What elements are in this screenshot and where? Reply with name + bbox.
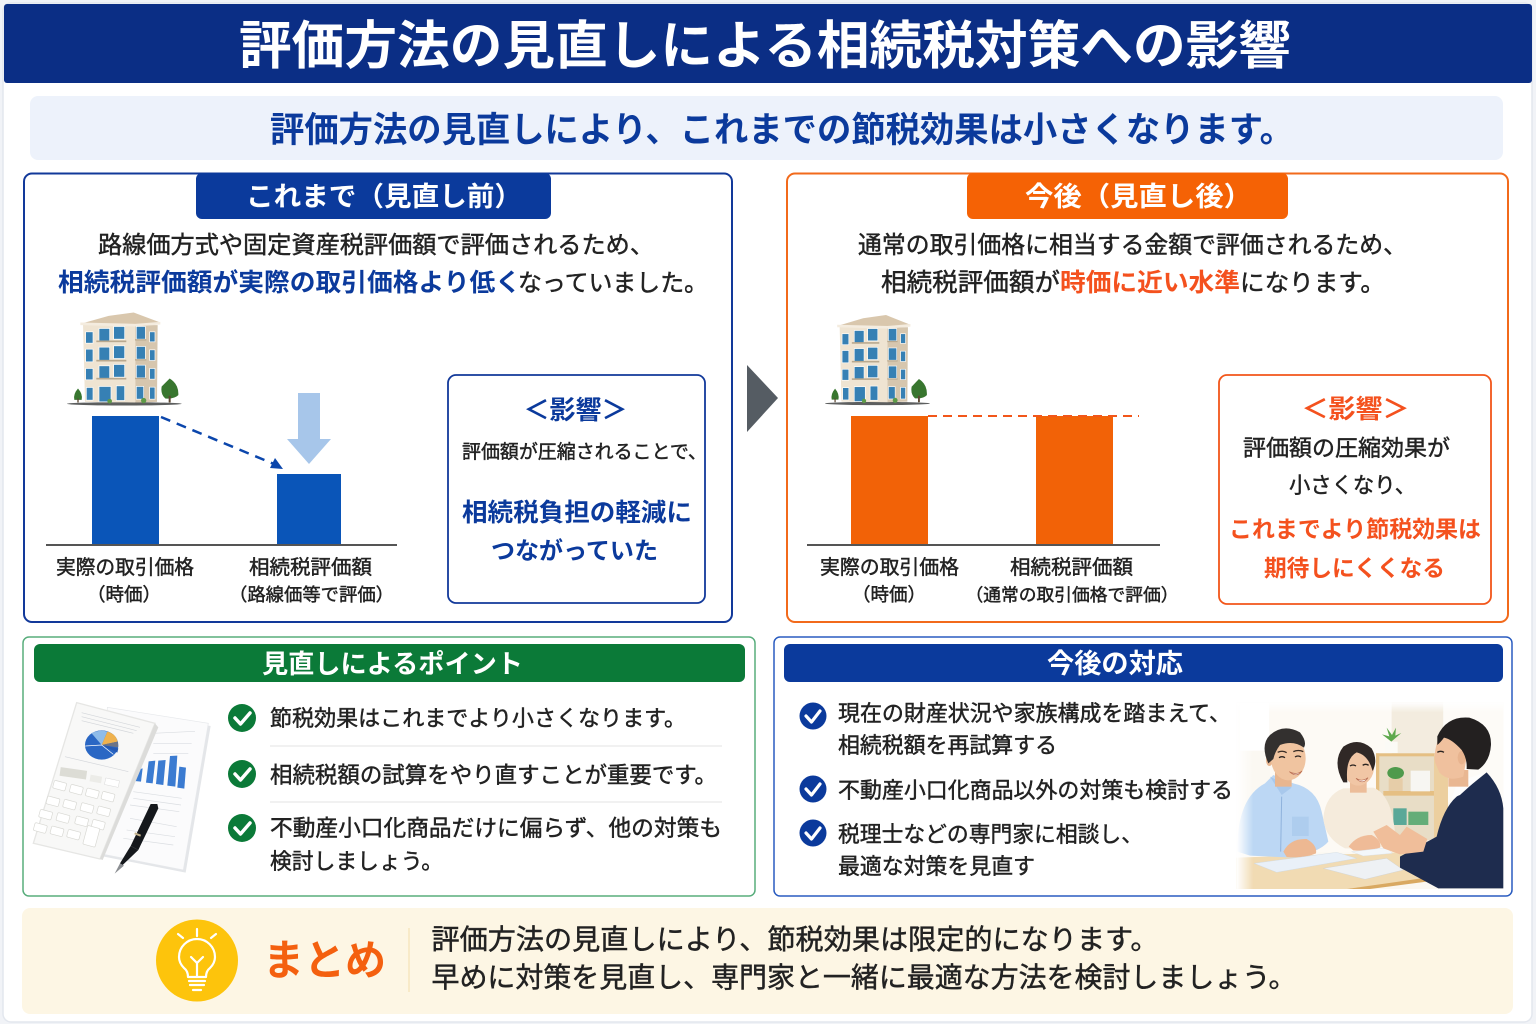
bar label: tax valuation: [966, 556, 1178, 605]
subtitle banner: [30, 96, 1503, 160]
illustration: family consulting an advisor: [1237, 702, 1503, 889]
description text: なっていました。: [518, 270, 708, 297]
heading: future actions: 今後の対応: [1047, 649, 1183, 679]
arrow: before to after: [747, 365, 778, 432]
callout: impact after: 期待しにくくなる: [1264, 555, 1445, 581]
bar label: market price: 実際の取引価格: [56, 556, 194, 579]
bar chart: after: [807, 416, 1160, 545]
callout: impact before: [448, 375, 707, 603]
pen: [115, 804, 158, 874]
arrow: dashed decrease: [161, 417, 283, 469]
summary text: 評価方法の見直しにより、節税効果は限定的になります。: [432, 924, 1158, 955]
documents on table: [1254, 848, 1403, 879]
panel: after review: [787, 173, 1508, 622]
summary label: まとめ: [263, 937, 386, 984]
advisor: [1373, 717, 1503, 888]
panel: summary: [22, 908, 1513, 1014]
heading: review points: [34, 644, 745, 682]
table: [1237, 852, 1427, 889]
callout: impact before: 相続税負担の軽減に: [462, 499, 692, 527]
description text: 通常の取引価格に相当する金額で評価されるため、: [858, 232, 1407, 259]
illustration: calculator, report and pen: [33, 703, 211, 874]
panel heading: before: これまで（見直し前）: [246, 182, 522, 212]
bookshelf: [1376, 728, 1448, 840]
bar label: tax valuation: 相続税評価額: [1010, 556, 1133, 579]
callout: impact after: [1219, 375, 1491, 604]
panel: review points: [23, 637, 755, 896]
summary text: [432, 924, 1296, 993]
summary text: 早めに対策を見直し、専門家と一緒に最適な方法を検討しましょう。: [432, 962, 1296, 993]
title text: 評価方法の見直しによる相続税対策への影響: [239, 18, 1291, 76]
bar label: tax valuation: （通常の取引価格で評価）: [966, 585, 1178, 605]
callout: impact before: ＜影響＞: [524, 395, 628, 425]
panel heading: after: 今後（見直し後）: [1025, 182, 1252, 212]
check item 3: 不動産小口化商品だけに偏らず、他の対策も: [270, 816, 722, 841]
man: [1237, 728, 1328, 858]
callout: impact before: 評価額が圧縮されることで、: [462, 441, 707, 463]
bar label: market price: [56, 556, 194, 605]
bar label: market price: （時価）: [87, 584, 161, 605]
action item 3: 最適な対策を見直す: [838, 854, 1035, 879]
callout: impact after: 評価額の圧縮効果が: [1243, 436, 1450, 461]
bar label: tax valuation: 相続税評価額: [249, 556, 372, 579]
check item 2: 相続税額の試算をやり直すことが重要です。: [270, 763, 717, 788]
callout: impact before: つながっていた: [491, 537, 658, 565]
callout: impact after: これまでより節税効果は: [1229, 516, 1481, 542]
panel heading: after: [967, 173, 1288, 219]
action item 2: 不動産小口化商品以外の対策も検討する: [838, 778, 1233, 803]
arrow: compression: [287, 393, 331, 464]
heading: review points: 見直しによるポイント: [262, 649, 523, 679]
description text: 路線価方式や固定資産税評価額で評価されるため、: [98, 232, 654, 259]
panel heading: before: [196, 173, 551, 219]
action item 1: 相続税額を再試算する: [838, 733, 1057, 758]
callout: impact after: 小さくなり、: [1289, 473, 1416, 498]
bar label: tax valuation: （路線価等で評価）: [229, 585, 394, 605]
description text: 時価に近い水準: [1060, 269, 1240, 297]
bar label: market price: （時価）: [852, 584, 926, 605]
action item 3: 税理士などの専門家に相談し、: [838, 822, 1143, 847]
panel: future actions: [774, 637, 1512, 896]
check item 3: [228, 814, 722, 874]
checklist: review points: [228, 704, 722, 874]
check item 1: 節税効果はこれまでより小さくなります。: [270, 706, 686, 731]
woman: [1323, 742, 1396, 851]
icon: building: [825, 315, 930, 405]
action item 3: [800, 820, 1143, 879]
bar chart: before: [46, 393, 397, 545]
icon: light bulb: [156, 920, 238, 1002]
bar label: market price: [820, 556, 959, 605]
check item 3: 検討しましょう。: [270, 849, 443, 874]
bar label: market price: 実際の取引価格: [820, 556, 959, 579]
checklist: future actions: [800, 701, 1233, 879]
bar label: tax valuation: [229, 556, 394, 605]
subtitle text: 評価方法の見直しにより、これまでの節税効果は小さくなります。: [270, 111, 1294, 150]
heading: future actions: [784, 644, 1503, 682]
description text: 相続税評価額が: [881, 269, 1060, 297]
title banner: [4, 4, 1532, 83]
description text: [58, 232, 708, 297]
panel: before review: [24, 173, 732, 622]
action item 1: [800, 701, 1231, 758]
description text: 相続税評価額が実際の取引価格より低く: [58, 268, 521, 297]
icon: building: [67, 312, 182, 405]
description text: になります。: [1240, 270, 1385, 297]
action item 1: 現在の財産状況や家族構成を踏まえて、: [838, 701, 1231, 726]
description text: [858, 232, 1407, 297]
callout: impact after: ＜影響＞: [1302, 394, 1410, 424]
pie chart: [85, 730, 118, 760]
